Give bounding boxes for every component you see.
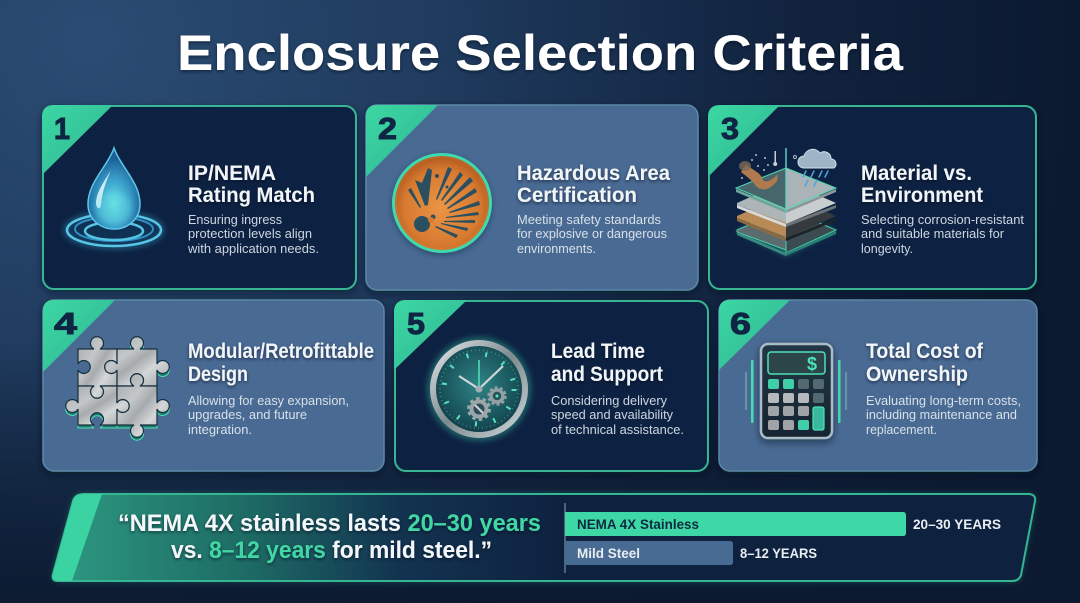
- bar chart: lifespan comparison: 20–30 YEARS: [913, 516, 1001, 532]
- panel: material vs. environment: 3: [721, 111, 739, 146]
- heading: IP/NEMA: [188, 162, 276, 185]
- callout: lifespan comparison banner: [53, 494, 1035, 581]
- description: of technical assistance.: [551, 422, 684, 437]
- description: Meeting safety standards: [517, 212, 661, 227]
- description: Ensuring ingress: [188, 212, 282, 227]
- description: [187, 212, 319, 256]
- description: protection levels align: [188, 226, 312, 241]
- icon: explosion hazard badge: [392, 154, 492, 255]
- quote: [118, 510, 541, 564]
- heading: [188, 162, 315, 207]
- description: [866, 393, 1021, 437]
- heading: [551, 340, 663, 386]
- quote: “NEMA 4X stainless lasts 20–30 years: [118, 510, 541, 537]
- bar chart: lifespan comparison: 8–12 YEARS: [740, 545, 817, 561]
- panel: lead time and support: 5: [407, 306, 425, 341]
- title: Enclosure Selection Criteria: [177, 25, 904, 81]
- description: [551, 393, 684, 437]
- description: replacement.: [866, 422, 937, 437]
- panel: total cost of ownership: [719, 300, 1037, 471]
- icon: clock with gears: [427, 337, 531, 441]
- description: speed and availability: [551, 407, 673, 422]
- heading: Ownership: [866, 363, 968, 386]
- icon: metal puzzle pieces: [66, 337, 169, 440]
- description: for explosive or dangerous: [517, 226, 667, 241]
- description: [188, 393, 349, 437]
- panel: hazardous area certification: 2: [378, 111, 397, 146]
- heading: [517, 162, 670, 207]
- heading: [866, 340, 984, 386]
- panel: lead time and support: [394, 300, 708, 471]
- heading: Material vs.: [861, 162, 972, 185]
- bar chart: lifespan comparison: [565, 503, 1001, 573]
- description: Considering delivery: [551, 393, 667, 408]
- description: [517, 212, 667, 256]
- heading: Lead Time: [551, 340, 645, 363]
- description: including maintenance and: [866, 407, 1017, 422]
- description: environments.: [517, 241, 596, 256]
- description: Selecting corrosion-resistant: [861, 212, 1024, 227]
- panel: material vs. environment: [708, 105, 1036, 289]
- panel: modular/retrofittable design: 4: [54, 306, 78, 341]
- bar chart: lifespan comparison: NEMA 4X Stainless: [577, 516, 699, 532]
- icon: calculator: [745, 344, 847, 438]
- description: Evaluating long-term costs,: [866, 393, 1021, 408]
- bar chart: lifespan comparison: Mild Steel: [577, 545, 640, 561]
- description: longevity.: [861, 241, 913, 256]
- heading: Environment: [861, 184, 983, 207]
- icon: water drop: [66, 148, 162, 247]
- heading: Hazardous Area: [517, 162, 670, 185]
- heading: Total Cost of: [866, 340, 984, 363]
- heading: Rating Match: [188, 184, 315, 207]
- panel: total cost of ownership: 6: [730, 306, 751, 341]
- icon: material layers: [736, 148, 836, 256]
- description: Allowing for easy expansion,: [188, 393, 349, 408]
- description: integration.: [188, 422, 252, 437]
- panel: hazardous area certification: [366, 105, 698, 290]
- description: [861, 212, 1024, 256]
- description: upgrades, and future: [188, 407, 307, 422]
- heading: and Support: [551, 363, 663, 386]
- panel: IP/NEMA rating match: 1: [54, 111, 70, 146]
- heading: Modular/Retrofittable: [188, 340, 374, 363]
- quote: vs. 8–12 years for mild steel.”: [171, 537, 492, 564]
- description: with application needs.: [187, 241, 319, 256]
- heading: Certification: [517, 184, 637, 207]
- icon: calculator: $: [807, 354, 817, 374]
- panel: IP/NEMA rating match: [42, 105, 356, 289]
- description: and suitable materials for: [861, 226, 1005, 241]
- heading: Design: [188, 363, 248, 386]
- heading: [188, 340, 374, 386]
- panel: modular/retrofittable design: [43, 300, 384, 471]
- heading: [861, 162, 983, 207]
